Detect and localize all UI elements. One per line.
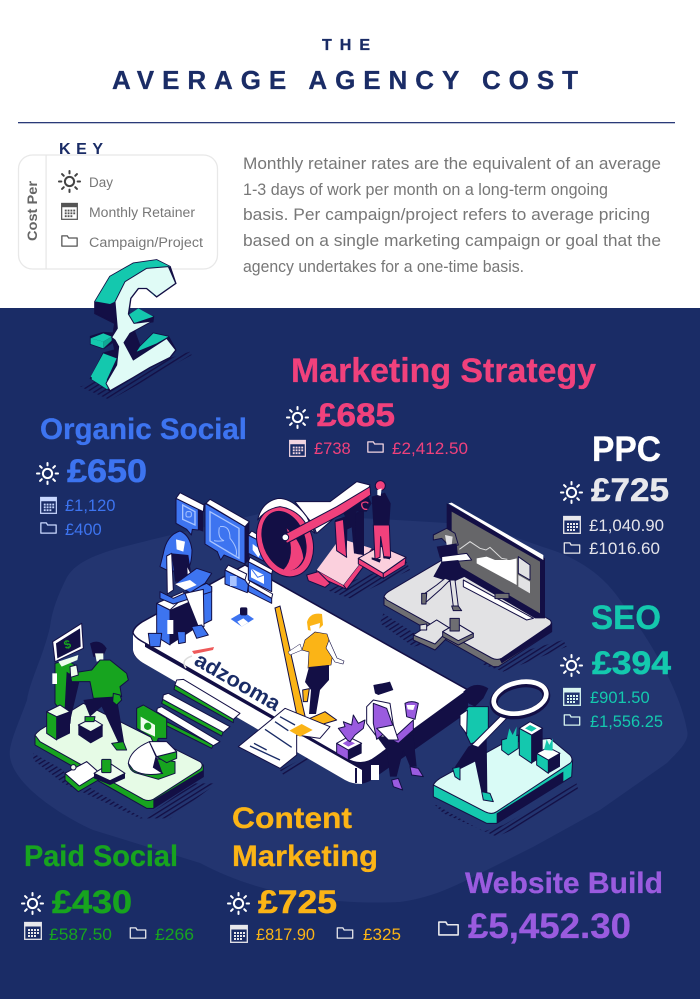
intro paragraph: agency undertakes for a one-time basis.	[243, 258, 524, 276]
panel: paid social: £430	[52, 884, 132, 920]
panel: key	[18, 141, 218, 269]
intro paragraph: 1-3 days of work per month on a long-term ongoing	[243, 181, 608, 199]
icon: pound sign	[80, 260, 192, 400]
steps	[174, 685, 233, 723]
panel: marketing strategy: £685	[317, 397, 395, 433]
header background	[0, 0, 700, 308]
man	[377, 735, 417, 777]
panel: key: KEY	[59, 141, 103, 158]
panel: seo: £394	[592, 645, 671, 681]
chat bubble and pie chart	[137, 705, 167, 747]
intro paragraph: based on a single marketing campaign or goal that the	[243, 232, 661, 250]
illustration: social media woman and icons	[148, 493, 273, 647]
panel: seo: SEO	[591, 599, 661, 637]
intro paragraph: basis. Per campaign/project refers to average pricing	[243, 206, 650, 224]
background blob	[10, 513, 688, 903]
teal man	[455, 737, 487, 793]
panel: marketing strategy: Marketing Strategy	[291, 352, 596, 390]
illustration: megaphone and man	[247, 481, 410, 598]
title	[112, 37, 578, 95]
panel: content marketing: Marketing	[232, 840, 378, 873]
panel: organic social: £1,120	[65, 497, 115, 515]
panel: ppc: £725	[591, 472, 669, 508]
panel: seo: £901.50	[590, 689, 650, 707]
panel: seo: £1,556.25	[590, 713, 663, 731]
panel: key: Day	[89, 175, 113, 190]
illustration: grey platform with presentation board	[380, 503, 567, 672]
panel: website build	[439, 867, 663, 946]
panel: organic social: £650	[67, 453, 147, 489]
plant pot	[337, 743, 348, 760]
panel: content marketing: £325	[363, 926, 401, 944]
panel: key: Cost Per	[24, 180, 40, 241]
panel: paid social: £266	[155, 926, 194, 944]
platform	[35, 735, 203, 808]
kiosk	[55, 660, 75, 723]
panel: content marketing: Content	[232, 802, 352, 835]
panel: ppc	[561, 430, 669, 558]
panel: website build: £5,452.30	[468, 907, 631, 946]
panel: content marketing: £725	[258, 884, 337, 920]
panel: marketing strategy: £738	[314, 440, 351, 458]
panel: paid social: Paid Social	[24, 840, 178, 873]
illustration: paid social scene: $	[62, 637, 73, 652]
panel: organic social: £400	[65, 521, 102, 539]
panel: ppc: PPC	[592, 430, 661, 469]
panel: content marketing	[228, 802, 401, 944]
planters	[502, 735, 518, 755]
panel: marketing strategy	[287, 352, 596, 458]
panel: paid social: £587.50	[49, 926, 112, 944]
small plates	[65, 762, 100, 792]
panel: ppc: £1,040.90	[589, 517, 664, 535]
illustration: yellow woman with pencil	[275, 606, 344, 722]
panel: seo	[561, 599, 671, 731]
illustration: document, man and plant	[238, 682, 423, 790]
small chat bubble	[176, 493, 204, 535]
navy background panel	[0, 308, 700, 999]
boxes	[47, 712, 57, 740]
illustration: paid social scene	[33, 623, 240, 818]
panel: paid social	[22, 840, 194, 944]
panel: organic social	[37, 413, 247, 539]
intro paragraph	[243, 155, 661, 276]
panel: marketing strategy: £2,412.50	[392, 440, 468, 458]
title: THE	[322, 37, 370, 54]
illustration: seo platform and magnifier	[433, 677, 578, 837]
panel: ppc: £1016.60	[589, 540, 660, 558]
panel: website build: Website Build	[465, 867, 663, 900]
panel: content marketing: £817.90	[256, 926, 315, 944]
panel: key: Monthly Retainer	[89, 205, 196, 220]
seated woman	[148, 531, 254, 647]
tile stack	[225, 531, 273, 603]
person	[90, 642, 107, 660]
illustration: central white platform	[133, 565, 468, 784]
intro paragraph: Monthly retainer rates are the equivalent of an average	[243, 155, 661, 173]
title: AVERAGE AGENCY COST	[112, 65, 578, 95]
large chat bubble	[205, 499, 249, 564]
panel: key: Campaign/Project	[89, 235, 203, 250]
illustration: logo: adzooma	[190, 648, 285, 716]
panel: organic social: Organic Social	[40, 413, 247, 446]
